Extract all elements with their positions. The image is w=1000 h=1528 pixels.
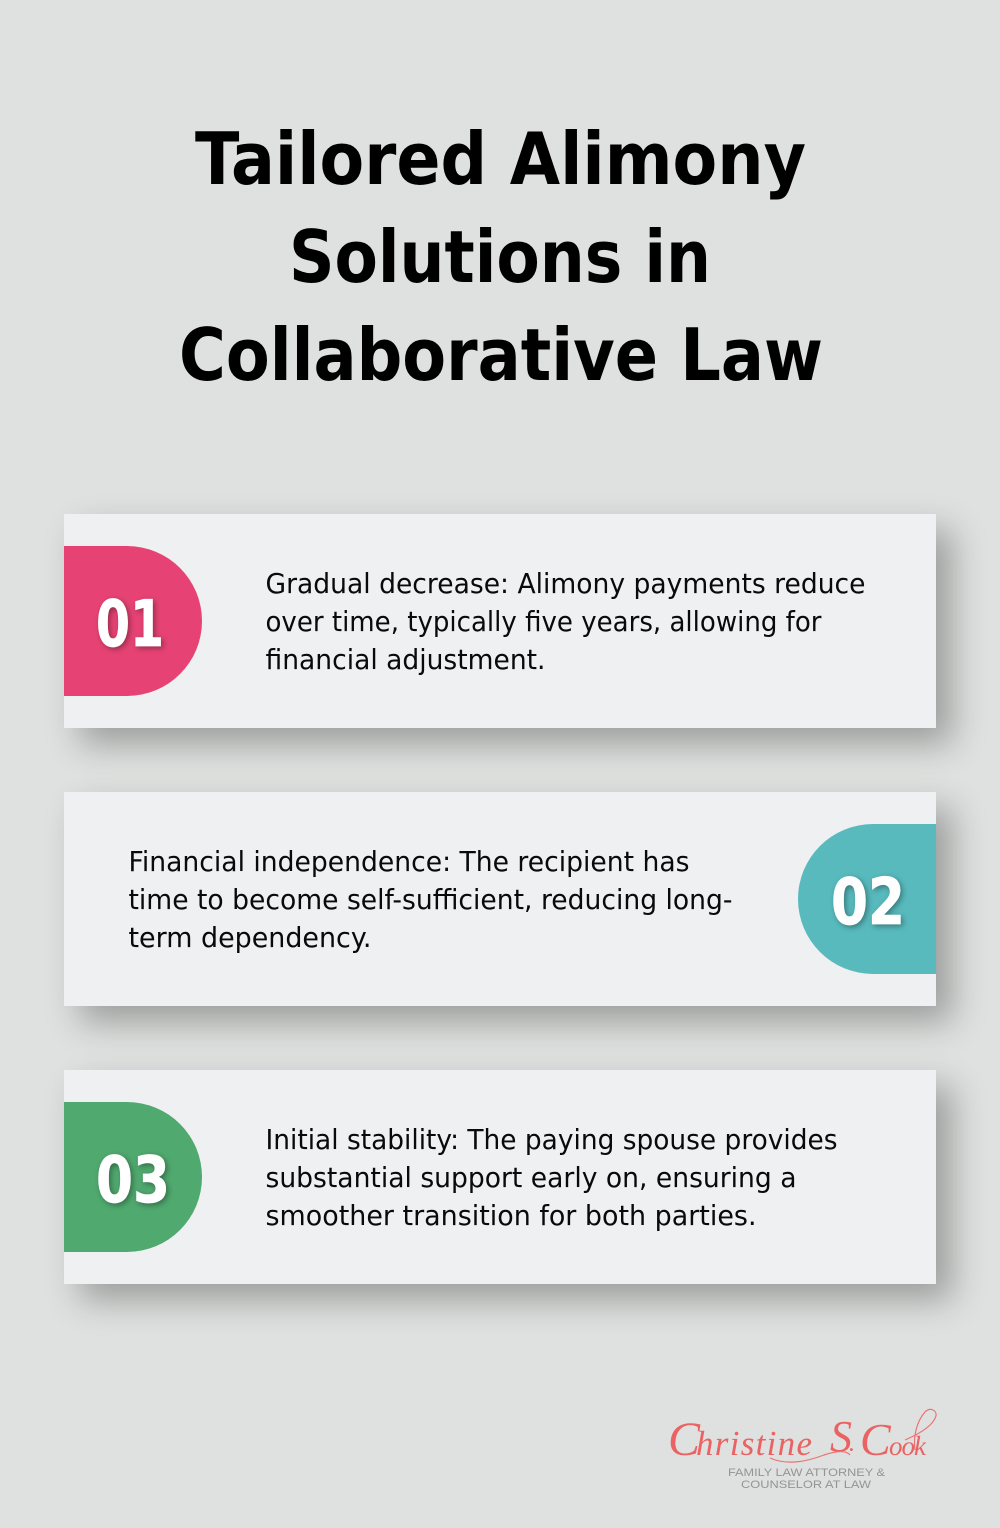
logo: Christine S. Cook: C: [668, 1413, 701, 1466]
step 02 text: Financial independence: The recipient has: [128, 846, 690, 878]
title: Tailored Alimony: [195, 117, 806, 201]
panel: step 02: [64, 792, 936, 1006]
badge: 03: [64, 1102, 202, 1252]
step 03 text: smoother transition for both parties.: [266, 1200, 756, 1232]
step 01 text: Gradual decrease: Alimony payments reduce: [266, 568, 866, 600]
logo: Christine S. Cook: C: [860, 1414, 892, 1465]
step 02 text: 02: [831, 866, 905, 940]
logo: Christine S. Cook: .: [849, 1431, 855, 1457]
step 02 text: [128, 846, 906, 954]
step 03 text: [96, 1124, 838, 1232]
badge: 01: [64, 546, 202, 696]
step 01 text: [96, 568, 866, 676]
step 02 text: time to become self-sufficient, reducing long-: [128, 884, 732, 916]
step 01 text: financial adjustment.: [266, 644, 546, 676]
panel: step 03: [64, 1070, 936, 1284]
title: [179, 117, 823, 397]
logo: Christine S. Cook: hristine: [696, 1424, 812, 1463]
panel: step 01: [64, 514, 936, 728]
step 01 text: 01: [96, 588, 164, 662]
logo: Christine S. Cook: FAMILY LAW ATTORNEY &: [728, 1467, 886, 1479]
logo: Christine S. Cook: S: [830, 1412, 852, 1461]
logo: Christine S. Cook: ook: [889, 1431, 927, 1461]
step 03 text: Initial stability: The paying spouse provides: [266, 1124, 838, 1156]
step 03 text: substantial support early on, ensuring a: [266, 1162, 796, 1194]
title: Collaborative Law: [179, 313, 823, 397]
logo: Christine S. Cook: COUNSELOR AT LAW: [741, 1479, 872, 1491]
title: Solutions in: [289, 215, 711, 299]
badge: 02: [798, 824, 936, 974]
step 01 text: over time, typically five years, allowing for: [266, 606, 822, 638]
step 03 text: 03: [96, 1144, 170, 1218]
step 02 text: term dependency.: [128, 922, 372, 954]
